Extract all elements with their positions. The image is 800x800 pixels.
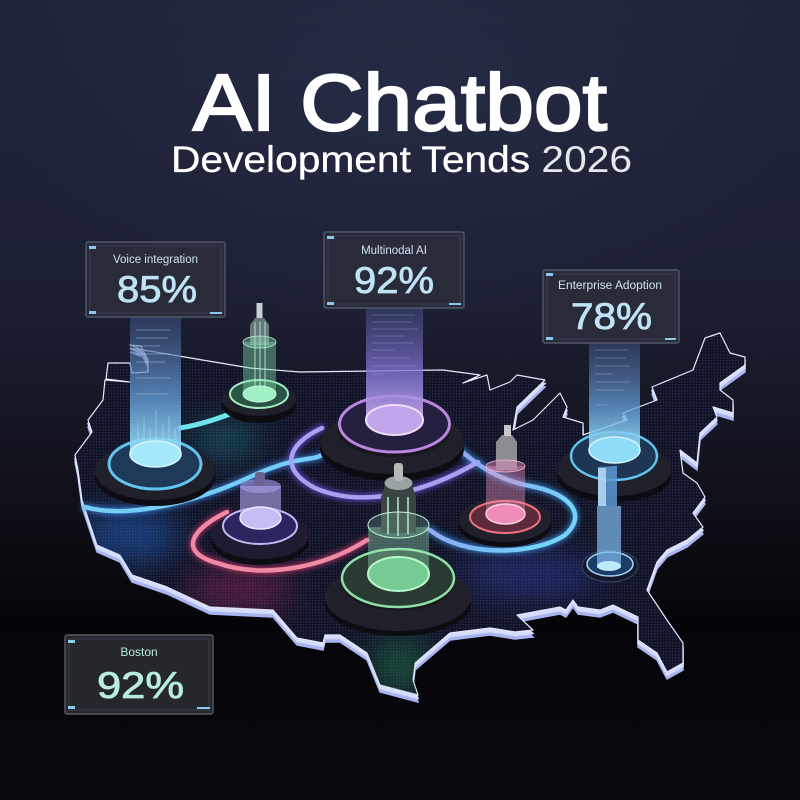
panel: Boston (65, 635, 213, 714)
panel: multimodal AI: Multinodal AI (361, 245, 427, 257)
ribbon: purple to blue loop (430, 447, 575, 551)
panel: voice integration: 85% (117, 269, 197, 310)
panel: enterprise adoption: 78% (571, 296, 652, 337)
platform: multimodal purple (320, 308, 464, 481)
panel: multimodal AI (324, 232, 464, 308)
platform: enterprise adoption (557, 343, 671, 502)
ribbon glow (85, 428, 575, 570)
ribbon: cyan link (180, 408, 245, 428)
panel: enterprise adoption (543, 270, 679, 343)
panel: Boston: 92% (97, 665, 184, 706)
panel: voice integration (86, 242, 225, 317)
map of the United States (75, 333, 745, 702)
panel: Boston: Boston (120, 645, 158, 659)
ribbon: pink link (193, 512, 367, 570)
ribbon: blue western link (85, 455, 322, 511)
platform: small purple cylinder (211, 472, 309, 565)
title: AI Chatbot (193, 58, 607, 147)
panel: multimodal AI: 92% (354, 260, 434, 301)
platform: voice integration (95, 317, 215, 506)
ribbon: purple loop (291, 428, 478, 497)
platform: tall blue column (582, 466, 638, 582)
platform: small green cylinder (222, 303, 296, 423)
panel: enterprise adoption: Enterprise Adoption (558, 280, 662, 292)
subtitle: Development Tends 2026 (171, 139, 632, 180)
panel: voice integration: Voice integration (113, 254, 198, 266)
platform: pink cylinder (459, 425, 551, 547)
platform: large green cylinder (325, 463, 471, 636)
